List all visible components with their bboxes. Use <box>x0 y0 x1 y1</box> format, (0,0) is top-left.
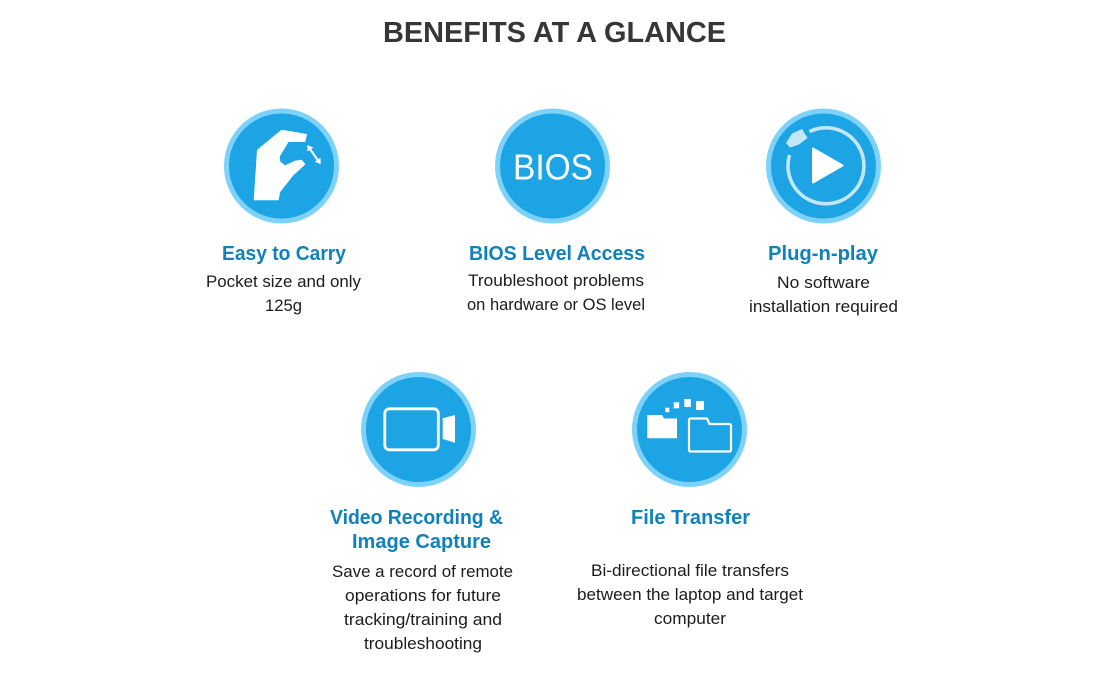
panel: file transfer <box>577 374 803 628</box>
panel: easy to carry <box>206 111 362 315</box>
description: on hardware or OS level <box>467 296 645 314</box>
heading: Image Capture <box>352 531 491 553</box>
description: 125g <box>265 297 302 315</box>
icon: BIOS <box>498 111 608 221</box>
description <box>332 563 513 653</box>
description: Troubleshoot problems <box>468 272 644 290</box>
description: Pocket size and only <box>206 273 362 291</box>
icon: hand pinching <box>226 111 336 221</box>
description <box>577 562 803 628</box>
heading: File Transfer <box>631 507 750 529</box>
panel: plug-n-play <box>749 111 898 316</box>
icon: BIOS: BIOS <box>513 146 593 188</box>
description <box>749 274 898 316</box>
description: Save a record of remote <box>332 563 513 581</box>
panel: bios level access <box>467 111 645 314</box>
description: between the laptop and target <box>577 586 803 604</box>
heading <box>330 507 503 553</box>
description: No software <box>777 274 870 292</box>
icon: video camera <box>364 374 474 484</box>
heading: Plug-n-play <box>768 243 879 265</box>
description <box>206 273 362 315</box>
panel: video recording and image capture <box>330 374 513 653</box>
heading: BIOS Level Access <box>469 243 645 265</box>
heading: Easy to Carry <box>222 243 347 265</box>
description: tracking/training and <box>344 611 502 629</box>
description: computer <box>654 610 727 628</box>
description: Bi-directional file transfers <box>591 562 789 580</box>
description <box>467 272 645 314</box>
icon: plug and play <box>768 111 878 221</box>
icon: folders <box>634 374 744 484</box>
description: operations for future <box>345 587 501 605</box>
description: installation required <box>749 298 898 316</box>
description: troubleshooting <box>364 635 482 653</box>
title: BENEFITS AT A GLANCE <box>383 17 726 49</box>
heading: Video Recording & <box>330 507 503 529</box>
